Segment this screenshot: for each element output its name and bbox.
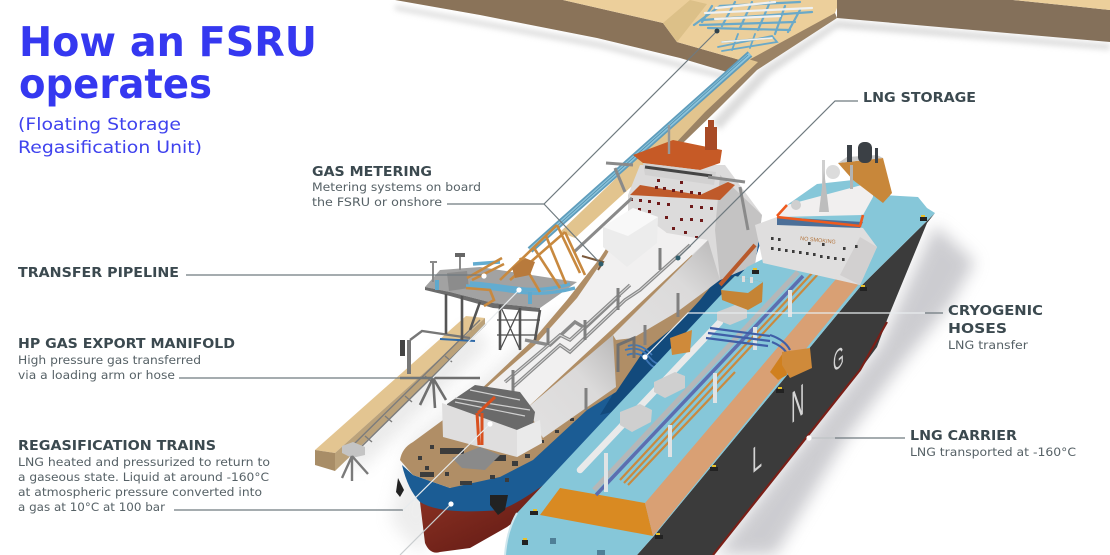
label: HP gas export manifold (18, 287, 522, 382)
storage tank side aft (613, 240, 720, 340)
label: cryogenic hoses: LNG transfer (948, 338, 1028, 352)
subtitle: (Floating Storage (18, 115, 181, 135)
blue hose bridge (706, 328, 790, 352)
label: HP gas export manifold: HP GAS EXPORT MANIFOLD (18, 336, 235, 352)
blue manifold pipes (466, 262, 575, 293)
label: LNG storage (676, 90, 976, 260)
label: transfer pipeline: TRANSFER PIPELINE (18, 265, 179, 281)
FSRU deck (400, 205, 760, 488)
label: regasification trains: LNG heated and pressurized to return to (18, 455, 270, 469)
regasification trains (447, 385, 535, 432)
grey pipe rack (594, 272, 798, 490)
bow deck fittings (418, 418, 574, 485)
label: gas metering: the FSRU or onshore (312, 195, 442, 209)
white vapour line (580, 322, 720, 470)
FSRU windows (630, 179, 713, 248)
cargo tank orange front (540, 488, 653, 536)
carrier teal deck (505, 180, 935, 555)
carrier waterline (713, 322, 887, 555)
onshore pipework (694, 2, 812, 51)
hull lettering LNG: N (791, 373, 804, 434)
title: How an FSRU (19, 18, 317, 66)
label: LNG carrier: LNG CARRIER (910, 428, 1018, 444)
orange cryogenic block (721, 276, 763, 310)
forward white block (603, 208, 658, 267)
jetty strip (315, 316, 486, 481)
carrier wall text: NO SMOKING (800, 236, 836, 246)
loading platform (425, 225, 603, 350)
hull lettering LNG (752, 340, 844, 482)
orange loading arms (466, 225, 585, 306)
title (19, 18, 317, 108)
label: cryogenic hoses (642, 303, 1043, 360)
FSRU red underwater hull (420, 480, 570, 553)
deck modules (620, 404, 652, 432)
FSRU vessel (396, 120, 766, 553)
label: LNG carrier (806, 428, 1076, 459)
storage tank side forward (527, 335, 616, 438)
label: regasification trains: a gas at 10°C at 100 bar (18, 500, 165, 514)
label: cryogenic hoses: CRYOGENIC (948, 303, 1043, 319)
label: HP gas export manifold: High pressure gas transferred (18, 353, 201, 367)
port walkway rail (574, 198, 632, 252)
label: cryogenic hoses: HOSES (948, 321, 1007, 337)
label: gas metering (312, 164, 481, 209)
orange deck crane (477, 413, 482, 445)
hull pointer (400, 501, 454, 555)
FSRU superstructure (606, 120, 762, 285)
carrier superstructure (755, 142, 892, 285)
anchor (490, 495, 508, 515)
storage tank top (478, 208, 708, 408)
label: HP gas export manifold: via a loading arm or hose (18, 368, 175, 382)
hull lettering LNG: L (752, 434, 762, 482)
cargo hoses between ships (618, 338, 670, 372)
subtitle (18, 115, 202, 158)
label: gas metering: GAS METERING (312, 164, 432, 180)
onshore land (395, 0, 1110, 172)
FSRU blue hull (402, 225, 766, 511)
hull lettering LNG: G (833, 340, 844, 380)
cargo tank peach side (645, 272, 858, 536)
label: regasification trains: a gaseous state. Liquid at around -160°C (18, 470, 269, 484)
tank-top pipework (505, 245, 690, 387)
orange manifold crane (782, 348, 812, 378)
ground shadows (340, 5, 1110, 555)
causeway and transfer pipeline (528, 54, 758, 252)
carrier dark hull (637, 213, 935, 555)
deck masts (606, 290, 790, 492)
subtitle: Regasification Unit) (18, 138, 202, 158)
label: gas metering: Metering systems on board (312, 180, 481, 194)
label: regasification trains: at atmospheric pressure converted into (18, 485, 262, 499)
label: regasification trains (18, 421, 493, 514)
title: operates (19, 60, 212, 108)
label: regasification trains: REGASIFICATION TRAINS (18, 438, 216, 454)
orange pipes (620, 270, 820, 485)
floating storage label line (447, 28, 720, 266)
label: LNG carrier: LNG transported at -160°C (910, 445, 1076, 459)
LNG carrier (505, 142, 935, 555)
carrier mooring fittings (522, 217, 927, 545)
label: LNG storage: LNG STORAGE (863, 90, 976, 106)
label: transfer pipeline (18, 265, 487, 281)
jetty walkway (352, 320, 486, 450)
carrier windows (771, 237, 858, 261)
